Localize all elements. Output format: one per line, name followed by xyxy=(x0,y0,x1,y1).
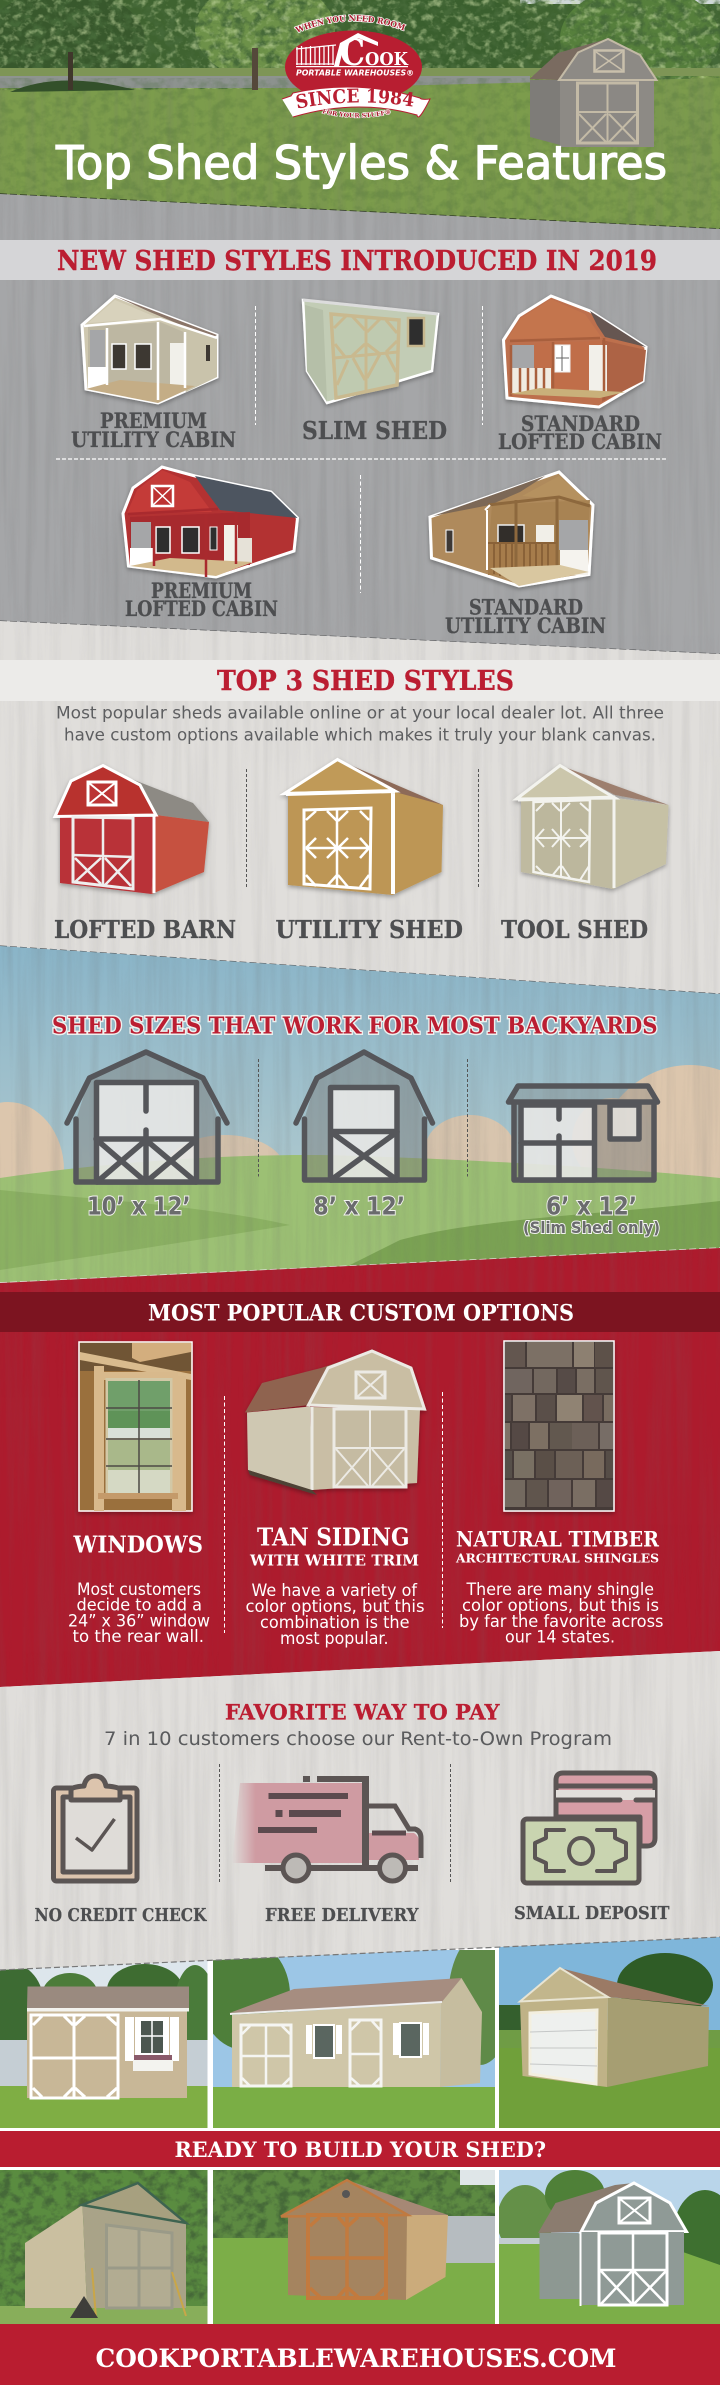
column: tan siding: We have a variety of xyxy=(252,1581,418,1601)
label: premium lofted cabin: LOFTED CABIN xyxy=(125,596,278,621)
column: tan siding: WITH WHITE TRIM xyxy=(249,1552,419,1570)
label: standard utility cabin: STANDARD xyxy=(469,594,583,620)
label: standard utility cabin xyxy=(446,598,606,634)
column: windows: WINDOWS xyxy=(73,1532,203,1558)
column: windows: 24” x 36” window xyxy=(68,1612,210,1632)
panel: new shed styles xyxy=(0,190,720,660)
column: natural timber: by far the favorite across xyxy=(459,1612,664,1632)
label: premium utility cabin: UTILITY CABIN xyxy=(71,427,236,452)
label: no credit check: NO CREDIT CHECK xyxy=(34,1906,207,1926)
photo: garage door shed xyxy=(499,1930,720,2128)
footer: website url xyxy=(0,2324,720,2385)
shed: tool shed xyxy=(516,766,668,889)
column: natural timber: our 14 states. xyxy=(505,1628,615,1648)
size labels xyxy=(87,1192,660,1237)
panel: most popular custom options xyxy=(0,1240,720,1690)
heading band: TOP 3 SHED STYLES xyxy=(217,666,514,697)
panel: hero header xyxy=(0,0,720,229)
label: premium utility cabin xyxy=(72,412,236,448)
label: standard lofted cabin: LOFTED CABIN xyxy=(498,429,662,454)
icon: clipboard xyxy=(54,1776,137,1881)
size labels: 6’ x 12’ xyxy=(546,1192,637,1220)
photo: brown shed with orange trim xyxy=(213,2170,495,2324)
column: tan siding: color options, but this xyxy=(246,1597,425,1617)
logo: Cook Portable Warehouses: OOK xyxy=(365,49,409,70)
size labels: (Slim Shed only) xyxy=(523,1218,660,1237)
heading band xyxy=(0,1292,720,1332)
intro text xyxy=(56,704,664,746)
photo: gray utility shed with tools xyxy=(0,2170,208,2324)
shed: standard utility cabin xyxy=(430,472,593,586)
heading band: MOST POPULAR CUSTOM OPTIONS xyxy=(148,1300,574,1326)
label: lofted barn: LOFTED BARN xyxy=(54,915,236,944)
size labels: 8’ x 12’ xyxy=(314,1192,405,1220)
label: small deposit: SMALL DEPOSIT xyxy=(514,1904,670,1924)
label: premium utility cabin: PREMIUM xyxy=(100,408,207,433)
logo: Cook Portable Warehouses: PORTABLE WAREHOUSES® xyxy=(296,68,414,78)
shed: lofted barn xyxy=(55,766,209,894)
icon: credit card and cash xyxy=(523,1773,655,1883)
panel: shed sizes xyxy=(0,940,720,1290)
size labels: 10’ x 12’ xyxy=(87,1192,190,1220)
panel: photo gallery row two xyxy=(0,2170,720,2324)
shed: standard lofted cabin xyxy=(504,296,646,407)
shed: slim shed xyxy=(303,300,438,403)
heading: SHED SIZES THAT WORK FOR MOST BACKYARDS xyxy=(52,1012,658,1040)
photo: architectural shingles swatch xyxy=(504,1341,614,1511)
column: natural timber xyxy=(455,1526,664,1648)
column: tan siding: combination is the xyxy=(260,1613,410,1633)
banner: ready to build: READY TO BUILD YOUR SHED? xyxy=(174,2137,546,2162)
column: tan siding: most popular. xyxy=(280,1629,388,1649)
label: premium lofted cabin: PREMIUM xyxy=(151,578,252,603)
footer: website url: COOKPORTABLEWAREHOUSES.COM xyxy=(96,2344,616,2373)
banner: ready to build xyxy=(0,2131,720,2167)
logo: Cook Portable Warehouses: FOR YOUR STUFF® xyxy=(322,108,391,118)
label: utility shed: UTILITY SHED xyxy=(276,915,463,944)
label: standard lofted cabin xyxy=(498,415,662,450)
title: Top Shed Styles & Features xyxy=(55,136,667,190)
logo: Cook Portable Warehouses: SINCE 1984 xyxy=(296,88,414,108)
photo shed on the hill xyxy=(530,38,656,147)
photo: tan lofted barn with white trim xyxy=(245,1351,424,1495)
photo: window interior xyxy=(79,1342,192,1511)
logo: Cook Portable Warehouses: WHEN YOU NEED ROOM xyxy=(294,14,407,33)
column: tan siding xyxy=(246,1522,425,1649)
logo: Cook Portable Warehouses xyxy=(282,14,431,118)
label: slim shed: SLIM SHED xyxy=(302,416,447,445)
label: free delivery: FREE DELIVERY xyxy=(265,1906,419,1926)
column: tan siding: TAN SIDING xyxy=(257,1522,410,1552)
shed: premium lofted cabin xyxy=(123,467,298,577)
logo: Cook Portable Warehouses: C xyxy=(340,32,365,74)
heading band: NEW SHED STYLES INTRODUCED IN 2019 xyxy=(57,246,657,277)
photo: shed with flower box xyxy=(0,1960,217,2128)
panel: photo gallery row one xyxy=(0,1930,720,2128)
column: natural timber: ARCHITECTURAL SHINGLES xyxy=(455,1550,659,1566)
panel: favorite way to pay xyxy=(0,1645,720,1975)
label: premium lofted cabin xyxy=(126,582,278,616)
label: tool shed: TOOL SHED xyxy=(501,915,648,944)
icon: 8x12 shed outline xyxy=(296,1052,432,1180)
intro text: Most popular sheds available online or at your local dealer lot. All three xyxy=(56,704,664,724)
column: natural timber: There are many shingle xyxy=(466,1580,654,1600)
column: windows: decide to add a xyxy=(76,1596,202,1616)
column: natural timber: NATURAL TIMBER xyxy=(456,1526,659,1552)
column: windows xyxy=(68,1532,210,1647)
icon: 6x12 slim shed outline xyxy=(508,1086,658,1180)
column: natural timber: color options, but this is xyxy=(462,1596,659,1616)
label: standard utility cabin: UTILITY CABIN xyxy=(445,613,606,638)
heading: FAVORITE WAY TO PAY xyxy=(225,1700,501,1724)
column: windows: Most customers xyxy=(77,1580,201,1600)
panel: top 3 shed styles xyxy=(0,615,720,1000)
subheading: 7 in 10 customers choose our Rent-to-Own Program xyxy=(104,1728,612,1750)
shed: premium utility cabin xyxy=(82,296,217,403)
shed: utility shed xyxy=(284,760,443,895)
heading band xyxy=(0,660,720,701)
label: standard lofted cabin: STANDARD xyxy=(521,411,640,436)
icon: 10x12 shed outline xyxy=(67,1052,227,1182)
photo: gray lofted barn xyxy=(497,2170,720,2324)
photo: long shed with shutters xyxy=(200,1935,512,2128)
icon: delivery truck xyxy=(232,1776,421,1881)
column: windows: to the rear wall. xyxy=(72,1627,204,1647)
intro text: have custom options available which makes it truly your blank canvas. xyxy=(64,726,656,746)
